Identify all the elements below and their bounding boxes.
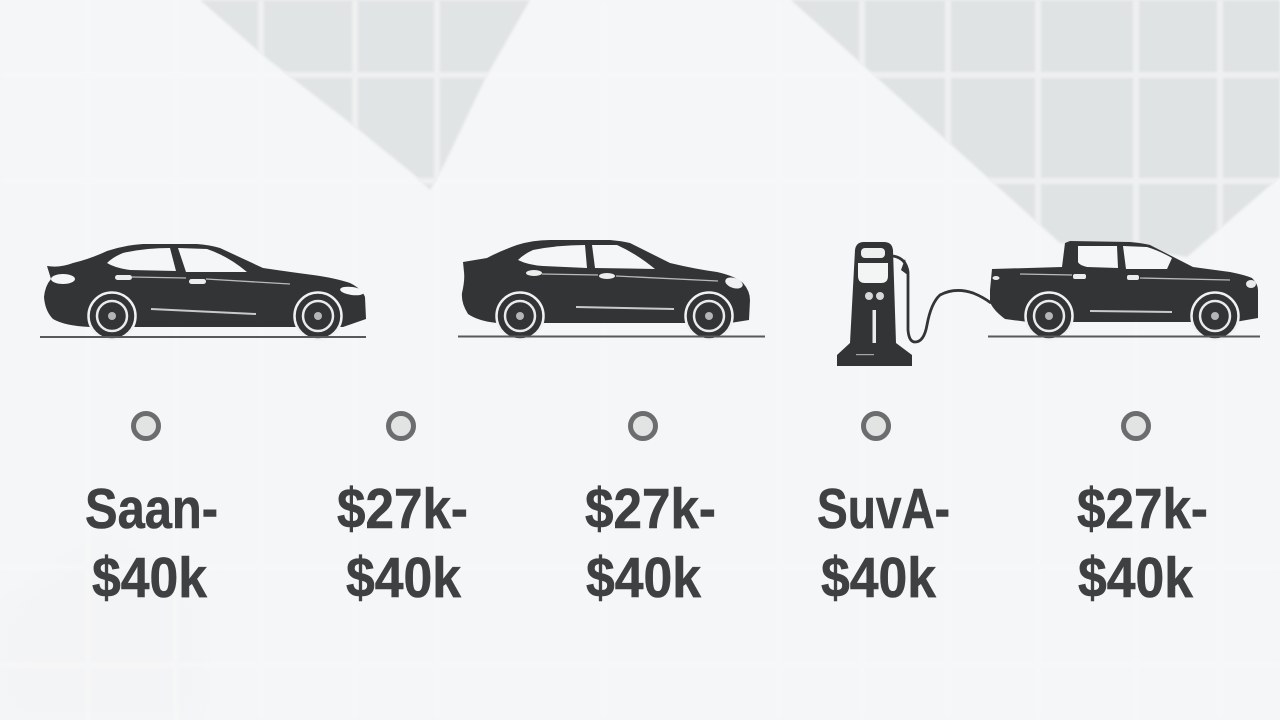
- icon: charging station with cable: [837, 242, 991, 366]
- label 4: $40k: [821, 546, 936, 610]
- car 3: pickup truck silhouette: [988, 241, 1260, 340]
- label 4: SuvA-: [817, 477, 950, 541]
- label 2: $27k-: [337, 477, 468, 541]
- car 2: compact sedan silhouette: [458, 240, 765, 340]
- label 5: $40k: [1078, 546, 1193, 610]
- marker dots row: [134, 414, 1148, 438]
- label 3: $27k-: [585, 477, 716, 541]
- label 3: $40k: [586, 546, 701, 610]
- car 1: sedan silhouette: [40, 244, 366, 340]
- background gray wedge right: [791, 0, 1280, 257]
- label 2: $40k: [346, 546, 461, 610]
- background gray wedge left: [200, 0, 530, 190]
- label 1: $40k: [92, 546, 207, 610]
- label 5: $27k-: [1077, 477, 1208, 541]
- label 1: Saan-: [85, 477, 218, 541]
